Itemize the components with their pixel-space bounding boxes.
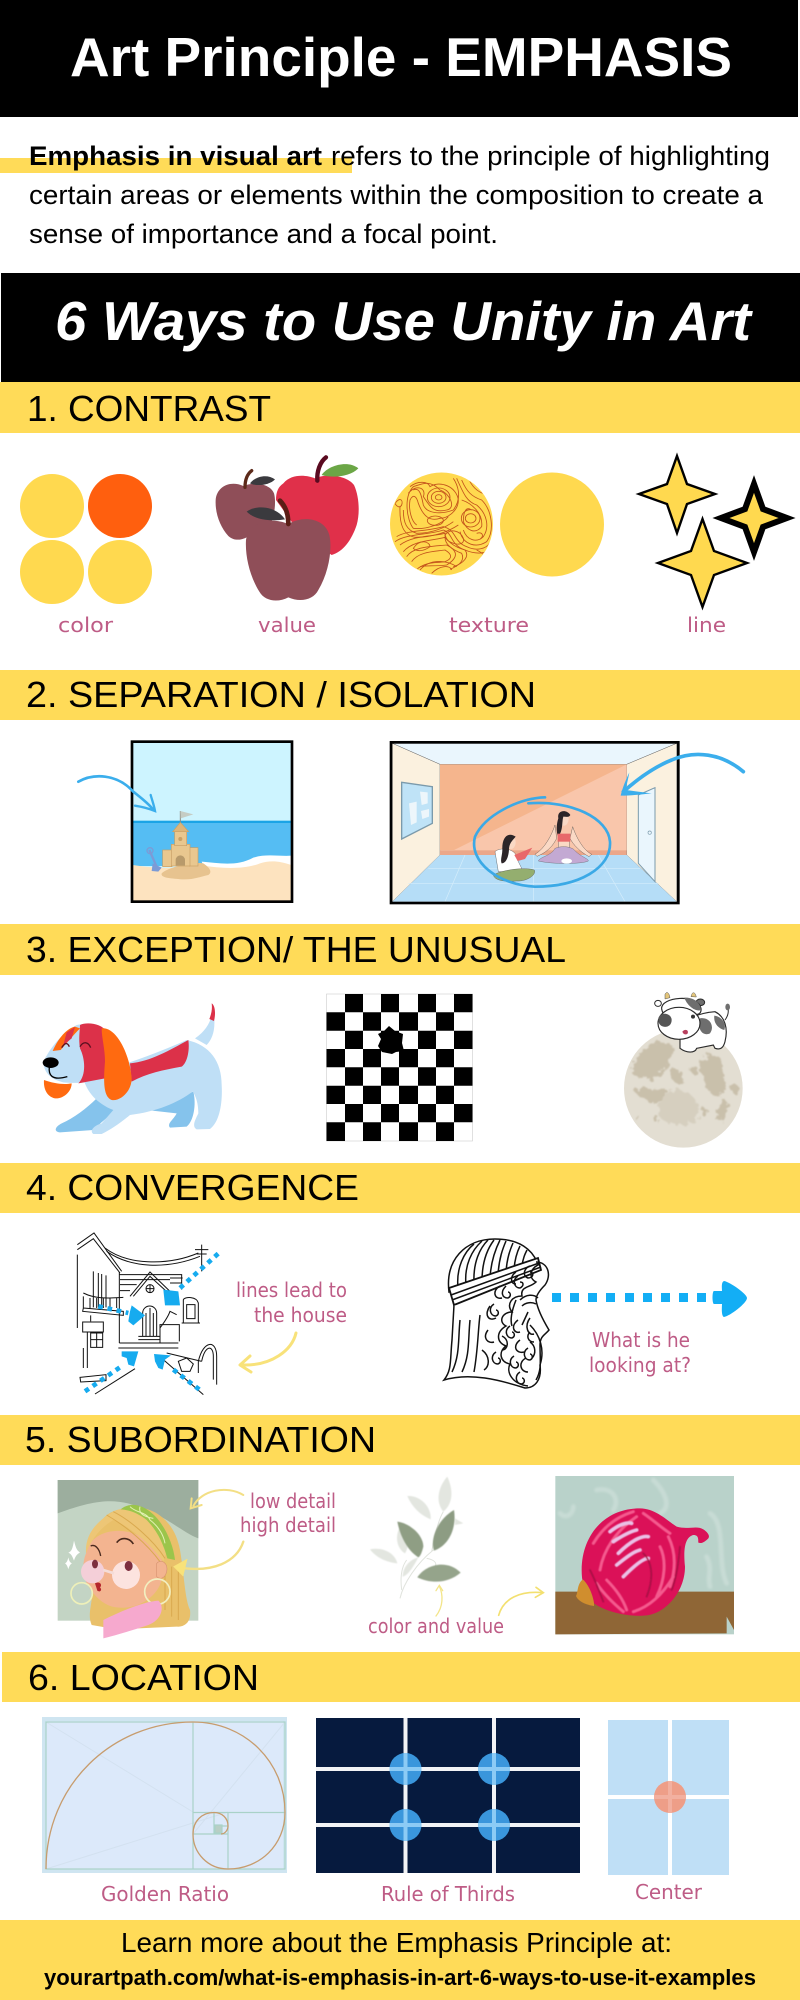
panel: separation examples	[78, 742, 743, 903]
subtitle banner: 6 Ways to Use Unity in Art	[55, 290, 754, 352]
caption: what is he looking at	[589, 1328, 691, 1377]
heading: 6. location	[2, 1652, 800, 1702]
odd blob	[378, 1026, 404, 1054]
diagram: golden ratio: Golden Ratio	[101, 1882, 229, 1906]
illustration: dog with odd colors	[43, 1003, 222, 1134]
dotted arrow	[552, 1281, 747, 1317]
intro text block	[0, 141, 770, 249]
intro text block: refers to the principle of highlighting	[331, 141, 770, 171]
panel: exception examples	[43, 993, 743, 1148]
diagram: rule of thirds	[316, 1718, 580, 1906]
heading: 2. separation / isolation	[0, 670, 800, 720]
panel: contrast examples	[20, 456, 787, 637]
illustration: sandcastle on beach	[78, 742, 292, 902]
line contrast stars: line	[687, 613, 726, 637]
diagram: center	[608, 1720, 729, 1904]
caption: low detail, high detail: low detail	[250, 1489, 336, 1513]
checkerboard with odd blob	[326, 994, 472, 1141]
heading: 5. subordination: 5. SUBORDINATION	[25, 1419, 376, 1460]
heading: 2. separation / isolation: 2. SEPARATION / ISOLATION	[26, 674, 536, 715]
heading: 4. convergence: 4. CONVERGENCE	[26, 1167, 359, 1208]
texture contrast circles: texture	[449, 613, 529, 637]
value contrast apples: value	[258, 613, 316, 637]
figure: meditating woman	[535, 811, 592, 864]
caption: what is he looking at: looking at?	[589, 1353, 691, 1377]
footer call to action: Learn more about the Emphasis Principle at:	[121, 1927, 672, 1958]
line contrast stars	[639, 456, 787, 637]
illustration: watercolor leaves	[370, 1477, 543, 1616]
panel: location examples	[42, 1717, 729, 1906]
intro text block: Emphasis in visual art	[29, 141, 322, 171]
footer call to action	[0, 1920, 800, 2000]
diagram: rule of thirds: Rule of Thirds	[381, 1882, 515, 1906]
heading: 3. exception / the unusual	[0, 924, 800, 975]
caption: low detail, high detail	[240, 1489, 336, 1537]
heading: 5. subordination	[0, 1415, 800, 1465]
value contrast apples	[216, 457, 359, 637]
figure: reading woman	[493, 835, 535, 881]
title banner	[0, 0, 798, 117]
intro text block: sense of importance and a focal point.	[29, 219, 498, 249]
caption: what is he looking at: What is he	[592, 1328, 690, 1352]
caption: lines lead to the house: lines lead to	[236, 1278, 347, 1302]
diagram: golden ratio	[42, 1717, 287, 1906]
texture contrast circles	[390, 472, 604, 637]
heading: 3. exception / the unusual: 3. EXCEPTION/ THE UNUSUAL	[26, 929, 566, 970]
footer call to action: yourartpath.com/what-is-emphasis-in-art-6-ways-to-use-it-examples	[44, 1965, 756, 1990]
heading: 1. contrast: 1. CONTRAST	[27, 388, 271, 429]
illustration: cow on moon	[624, 993, 743, 1148]
panel: subordination examples	[58, 1476, 734, 1638]
heading: 1. contrast	[0, 382, 800, 433]
diagram: center: Center	[635, 1880, 703, 1904]
title banner: Art Principle - EMPHASIS	[70, 26, 732, 88]
illustration: greek head sculpture	[444, 1239, 549, 1388]
illustration: house sketch with leading lines	[77, 1233, 220, 1395]
panel: convergence examples	[77, 1233, 747, 1395]
subtitle banner	[1, 273, 800, 382]
intro text block: certain areas or elements within the composition to create a	[29, 180, 763, 210]
caption: lines lead to the house	[236, 1278, 347, 1372]
heading: 4. convergence	[0, 1163, 800, 1213]
caption: low detail, high detail: high detail	[240, 1513, 336, 1537]
illustration: room with two women	[391, 742, 743, 903]
color contrast circles	[20, 474, 152, 637]
caption: color and value: color and value	[368, 1614, 504, 1638]
illustration: red onion painting	[555, 1476, 734, 1634]
heading: 6. location: 6. LOCATION	[28, 1657, 259, 1698]
color contrast circles: color	[58, 613, 114, 637]
caption: lines lead to the house: the house	[254, 1303, 347, 1327]
illustration: portrait with low and high detail	[58, 1480, 243, 1638]
